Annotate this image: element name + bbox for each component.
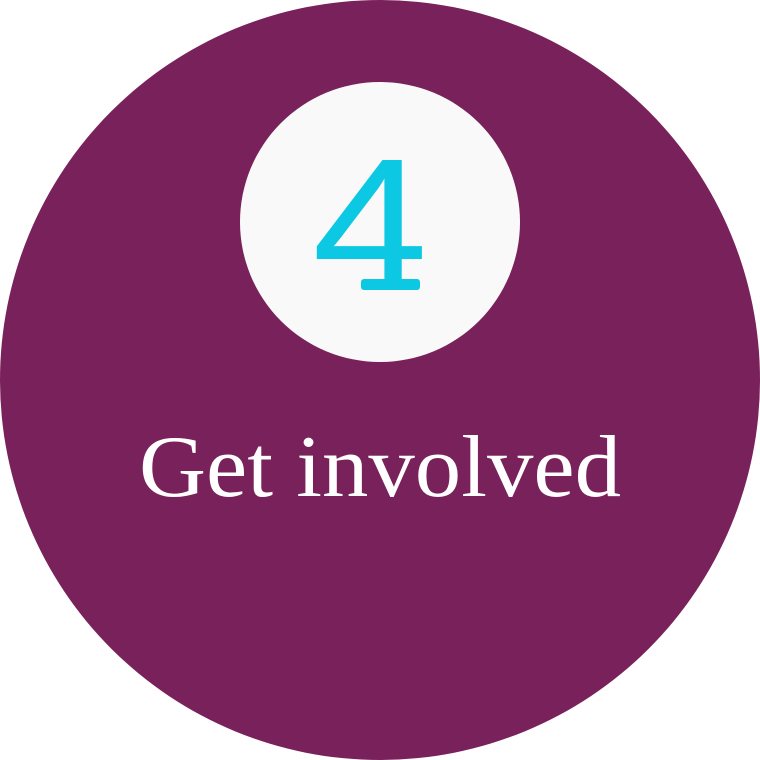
panel: white number circle [240, 82, 520, 362]
number 4: 4 [312, 121, 428, 328]
heading: Get involved: Get involved [139, 419, 621, 516]
